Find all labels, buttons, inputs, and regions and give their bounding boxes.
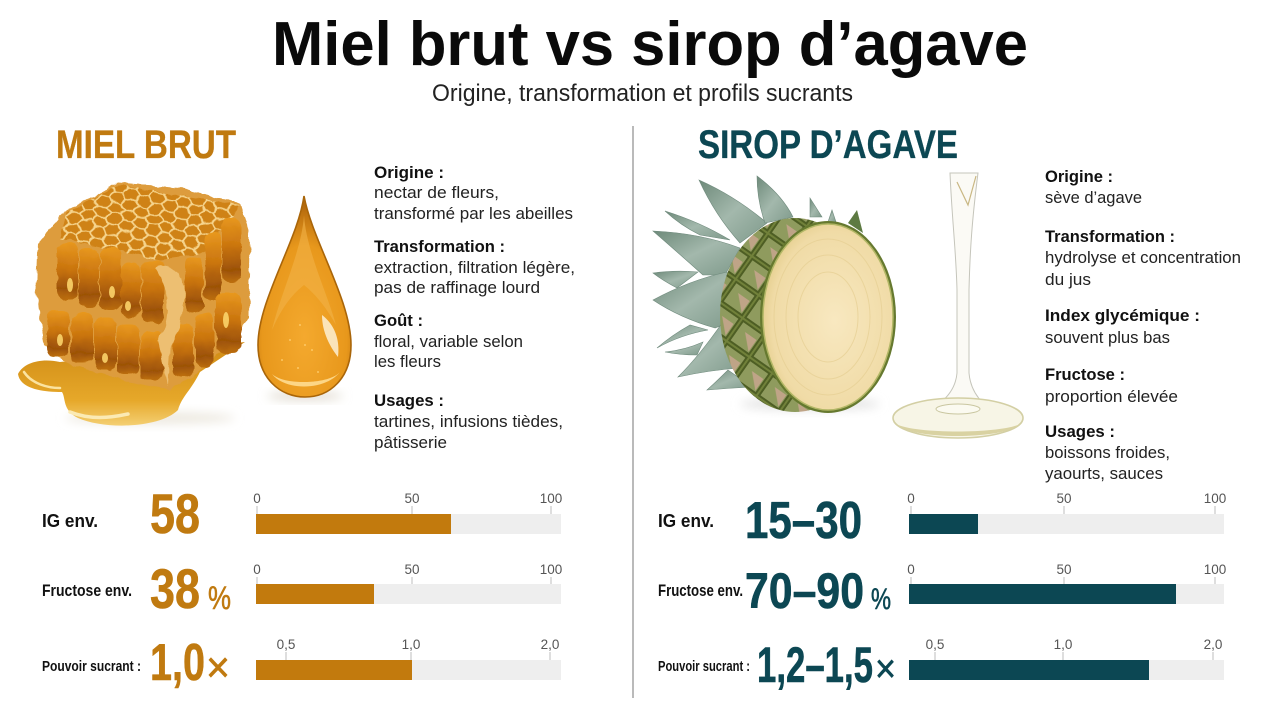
metric: fructose miel: 50 [404,562,420,577]
metric: fructose agave: 100 [1204,562,1226,577]
text block: origine: Origine : [1045,168,1113,186]
metric: IG agave: IG env. [658,511,714,531]
text block: transformation: du jus [1045,271,1091,289]
metric: fructose agave: % [871,583,891,616]
text block: usages: boissons froides, [1045,444,1170,462]
text block: transformation: Transformation : [374,238,505,256]
text block: origine: nectar de fleurs, [374,184,499,202]
metric: IG miel: 100 [540,491,562,506]
metric: pouvoir sucrant miel [42,634,561,692]
text block: usages: Usages : [1045,423,1115,441]
metric: pouvoir sucrant miel: Pouvoir sucrant : [42,658,141,675]
metric: pouvoir sucrant miel: 2,0 [541,637,559,652]
text block: goût [374,312,523,371]
metric: fructose agave: Fructose env. [658,581,743,600]
illustration: honeycomb with puddle [18,183,250,426]
text block: index glycémique [1045,307,1200,347]
text block: origine: sève d’agave [1045,189,1142,207]
metric: pouvoir sucrant agave: Pouvoir sucrant : [658,658,750,675]
metric: fructose miel [42,557,562,620]
metric: IG miel: IG env. [42,511,98,531]
text block: transformation: hydrolyse et concentration [1045,249,1241,267]
metric: fructose miel: 38 [150,557,200,620]
panel: sirop d'agave [653,123,1241,693]
metric: pouvoir sucrant agave: 2,0 [1204,637,1222,652]
text block: fructose: proportion élevée [1045,388,1178,406]
metric: IG agave: 100 [1204,491,1226,506]
metric: pouvoir sucrant agave: 1,0 [1054,637,1072,652]
metric: pouvoir sucrant miel: 1,0 [402,637,420,652]
text block: goût: floral, variable selon [374,333,523,351]
metric: pouvoir sucrant agave: × [875,647,896,691]
illustration: agave heart [653,176,896,413]
metric: IG agave: 50 [1056,491,1072,506]
metric: pouvoir sucrant agave: 1,2–1,5 [757,637,873,693]
central divider [632,126,634,698]
text block: usages: tartines, infusions tièdes, [374,413,563,431]
metric: IG agave: 15–30 [745,492,862,550]
metric: pouvoir sucrant miel: 1,0 [150,634,205,692]
text block: origine: Origine : [374,164,444,182]
metric: IG agave [658,491,1226,550]
metric: pouvoir sucrant agave [658,637,1224,693]
text block: transformation [1045,228,1241,289]
illustration: honey drop [258,196,351,400]
text block: fructose [1045,366,1178,406]
metric: fructose agave [658,562,1226,619]
metric: pouvoir sucrant miel: 0,5 [277,637,295,652]
metric: pouvoir sucrant miel: × [206,643,230,692]
text block: origine [1045,168,1142,207]
metric: IG miel [42,482,562,545]
text block: goût: les fleurs [374,353,441,371]
text block: index glycémique: souvent plus bas [1045,329,1170,347]
text block: transformation: extraction, filtration légère, [374,259,575,277]
text block: goût: Goût : [374,312,423,330]
heading: sirop d'agave: SIROP D’AGAVE [698,123,958,167]
title: Miel brut vs sirop d’agave [272,10,1028,79]
metric: fructose miel: 0 [253,562,261,577]
text block: usages: Usages : [374,392,444,410]
metric: fructose miel: 100 [540,562,562,577]
text block: usages: pâtisserie [374,434,447,452]
metric: IG miel: 0 [253,491,261,506]
metric: pouvoir sucrant agave: 0,5 [926,637,944,652]
metric: fructose agave: 50 [1056,562,1072,577]
panel: miel brut [18,123,575,692]
text block: usages [374,392,563,452]
text block: usages: yaourts, sauces [1045,465,1163,483]
metric: fructose miel: Fructose env. [42,581,132,600]
text block: transformation: pas de raffinage lourd [374,279,540,297]
text block: usages [1045,423,1170,483]
metric: IG agave: 0 [907,491,915,506]
metric: fructose miel: % [208,580,231,616]
text block: index glycémique: Index glycémique : [1045,307,1200,325]
metric: IG miel: 50 [404,491,420,506]
text block: transformation [374,238,575,297]
text block: origine: transformé par les abeilles [374,205,573,223]
illustration: syrup glass [893,173,1023,438]
metric: fructose agave: 0 [907,562,915,577]
metric: fructose agave: 70–90 [745,563,864,619]
text block: origine [374,164,573,223]
heading: miel brut: MIEL BRUT [56,123,236,167]
metric: IG miel: 58 [150,482,200,545]
text block: fructose: Fructose : [1045,366,1125,384]
text block: transformation: Transformation : [1045,228,1175,246]
subtitle: Origine, transformation et profils sucrants [432,80,853,107]
